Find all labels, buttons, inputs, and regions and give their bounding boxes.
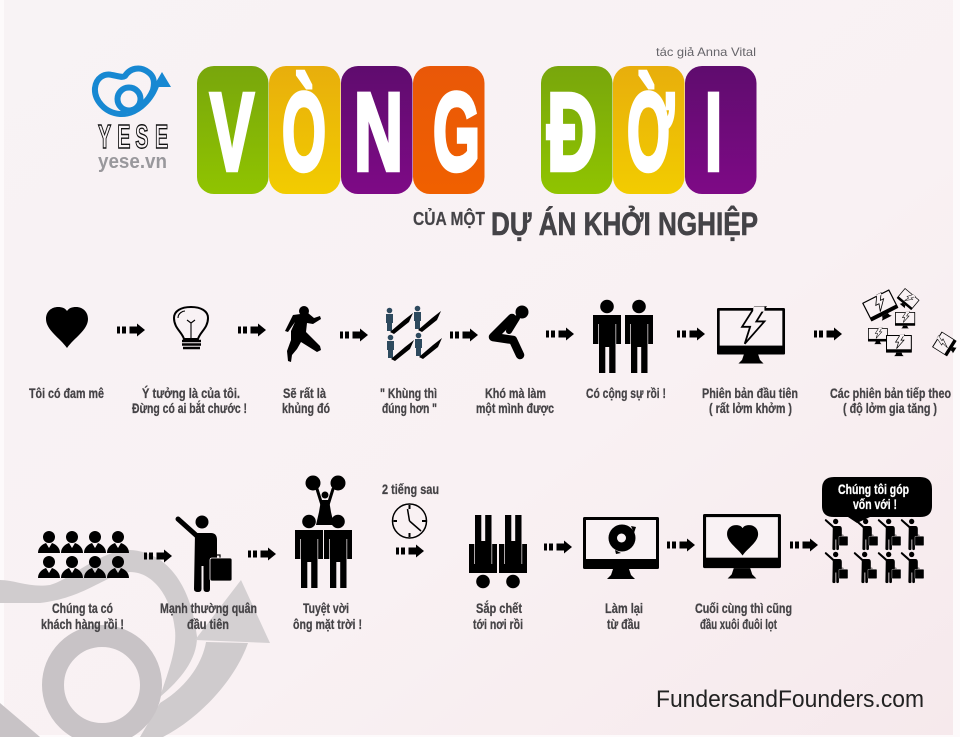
icon: heart	[46, 307, 88, 348]
speech bubble: Chúng tôi góp	[838, 482, 909, 497]
icon: man sitting with head in hands	[493, 306, 528, 355]
label: Sắp chết tới nơi rồi	[473, 601, 523, 632]
label: Cuối cùng thì cũng đầu xuôi đuôi lọt: đầu xuôi đuôi lọt	[700, 617, 777, 632]
label: Tuyệt vời ông mặt trời: Tuyệt vời	[303, 601, 349, 616]
label: Có cộng sự rồi: Có cộng sự rồi !	[586, 386, 666, 401]
label: Khùng thì đúng hơn	[380, 386, 437, 416]
arrow 2	[238, 324, 266, 336]
label: Tuyệt vời ông mặt trời: ông mặt trời !	[293, 617, 362, 632]
icon: angel investor with suitcase	[178, 516, 232, 592]
label: Phiên bản đầu tiên	[702, 386, 798, 416]
label: Khó mà làm một mình được	[476, 386, 554, 416]
label: Khó mà làm một mình được: một mình được	[476, 401, 554, 416]
label: Mạnh thường quân đầu tiên: Mạnh thường quân	[160, 601, 257, 616]
label: Các phiên bản tiếp theo	[830, 386, 951, 416]
arrow 6	[677, 328, 705, 340]
icon: many cracked monitors	[862, 288, 960, 358]
label: Mạnh thường quân đầu tiên: đầu tiên	[187, 617, 229, 632]
label: Chúng ta có khách hàng rồi: Chúng ta có	[52, 601, 113, 616]
label: Sắp chết tới nơi rồi: tới nơi rồi	[473, 617, 523, 632]
label: Tôi có đam mê: Tôi có đam mê	[29, 386, 104, 401]
subtitle: DỰ ÁN KHỞI NGHIỆP	[491, 206, 758, 242]
label: Cuối cùng thì cũng đầu xuôi đuôi lọt: Cuối cùng thì cũng	[695, 601, 792, 616]
label: Sẽ rất là khủng đó: Sẽ rất là	[283, 386, 326, 401]
title: VÒNG ĐỜI	[197, 66, 756, 194]
label: Khùng thì đúng hơn: " Khùng thì	[380, 386, 437, 401]
title: VÒNG ĐỜI: G	[433, 71, 480, 194]
arrow 8	[144, 550, 172, 562]
speech bubble: vốn với !	[853, 497, 897, 512]
icon: upside-down people on wheels	[469, 515, 527, 588]
arrow 4	[450, 328, 478, 342]
icon: cracked monitor	[717, 307, 785, 363]
arrow 12	[667, 538, 695, 552]
label: 2 tiếng sau: 2 tiếng sau	[382, 482, 439, 497]
icon: light bulb	[174, 307, 208, 348]
icon: escalators with people	[386, 306, 442, 361]
logo url: yese.vn	[98, 151, 167, 173]
label: Làm lại từ đầu: từ đầu	[607, 617, 640, 632]
label: Làm lại từ đầu	[605, 601, 643, 632]
subtitle	[413, 206, 758, 242]
label: Ý tưởng là của tôi	[132, 386, 247, 416]
icon: clock	[392, 504, 426, 538]
icon: customers crowd	[38, 531, 129, 578]
title: VÒNG ĐỜI: N	[354, 71, 403, 194]
label: Phiên bản đầu tiên: ( rất lởm khởm )	[709, 401, 792, 416]
arrow 9	[248, 548, 276, 560]
label: Chúng ta có khách hàng rồi	[41, 601, 124, 632]
title: VÒNG ĐỜI: Ờ	[627, 71, 674, 194]
label: Mạnh thường quân đầu tiên	[160, 601, 257, 632]
label: Chúng ta có khách hàng rồi: khách hàng rồi !	[41, 617, 124, 632]
icon: cheerleader on two cofounders	[295, 476, 352, 588]
label: Khó mà làm một mình được: Khó mà làm	[485, 386, 546, 401]
label: Tuyệt vời ông mặt trời	[293, 601, 362, 632]
label: Phiên bản đầu tiên: Phiên bản đầu tiên	[702, 386, 798, 401]
logo: YESE	[95, 69, 171, 173]
icon: monitor with restart arrows	[583, 517, 659, 579]
label: Sẽ rất là khủng đó: khủng đó	[282, 401, 330, 416]
label: Ý tưởng là của tôi: Ý tưởng là của tôi.	[142, 386, 240, 401]
arrow 1	[117, 324, 145, 336]
watermark logo	[0, 550, 270, 737]
title: VÒNG ĐỜI: Đ	[547, 71, 597, 194]
title: VÒNG ĐỜI: Ò	[282, 71, 326, 194]
icon: crowd of investors	[826, 519, 924, 583]
title: VÒNG ĐỜI: I	[705, 71, 722, 194]
icon: monitor with heart	[703, 514, 781, 578]
logo mark	[95, 69, 171, 114]
speech bubble	[822, 477, 932, 523]
subtitle: CỦA MỘT	[413, 208, 485, 229]
icon: running man	[285, 306, 321, 362]
source url: FundersandFounders.com	[656, 686, 924, 713]
label: Sắp chết tới nơi rồi: Sắp chết	[476, 601, 522, 616]
author credit: tác giả Anna Vital	[656, 45, 756, 59]
logo wordmark: YESE	[98, 118, 168, 155]
arrow 13	[790, 538, 818, 552]
arrow 10	[396, 544, 424, 558]
arrow 3	[340, 328, 368, 342]
label: Cuối cùng thì cũng đầu xuôi đuôi lọt	[695, 601, 792, 632]
arrow 7	[814, 328, 842, 340]
title: VÒNG ĐỜI: V	[210, 71, 254, 194]
label: Ý tưởng là của tôi: Đừng có ai bắt chước !	[132, 401, 247, 416]
label: Các phiên bản tiếp theo: ( độ lởm gia tăng )	[843, 401, 937, 416]
arrow 5	[546, 328, 574, 340]
label: Làm lại từ đầu: Làm lại	[605, 601, 643, 616]
icon: two cofounders	[593, 300, 653, 373]
arrow 11	[544, 540, 572, 554]
label: Khùng thì đúng hơn: đúng hơn "	[382, 401, 437, 416]
label: Sẽ rất là khủng đó	[282, 386, 330, 416]
